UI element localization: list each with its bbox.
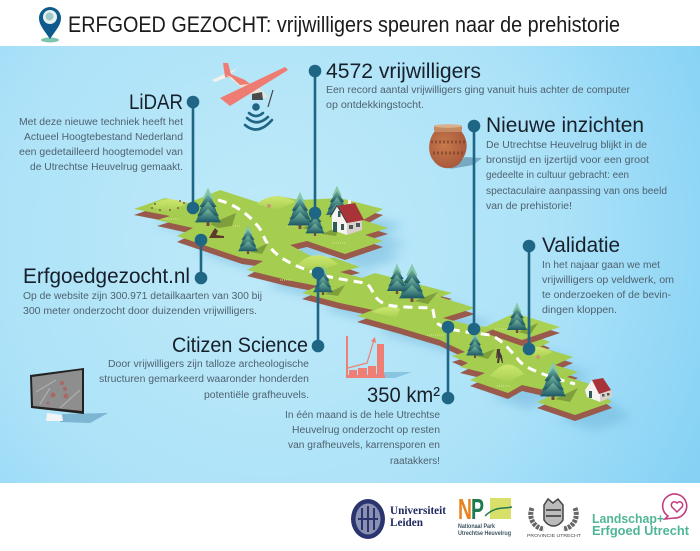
logo: Landschap + Erfgoed Utrecht bbox=[592, 494, 690, 538]
grass tufts bbox=[163, 219, 510, 386]
text block: 4572 vrijwilligers: op ontdekkingstocht. bbox=[326, 100, 424, 111]
icon: prehistoric pot bbox=[429, 124, 482, 169]
text block: LiDAR: een gedetailleerd hoogtemodel van bbox=[19, 147, 183, 158]
text block: 350 km2: 350 km² bbox=[367, 384, 440, 407]
icon: digging person bbox=[209, 228, 224, 238]
logo: Nationaal Park Utrechtse Heuvelrug: N bbox=[458, 494, 472, 526]
text block: Nieuwe inzichten: gedeelte in cultuur gebracht: een bbox=[486, 170, 629, 181]
pin: Erfgoedgezocht.nl bbox=[195, 234, 207, 284]
logo: Landschap + Erfgoed Utrecht: Landschap+ bbox=[592, 512, 664, 526]
text block: Erfgoedgezocht.nl: Erfgoedgezocht.nl bbox=[23, 265, 190, 288]
pin: 4572 vrijwilligers bbox=[309, 65, 321, 219]
pin: Validatie bbox=[523, 240, 535, 355]
icon: location pin bbox=[39, 7, 61, 43]
text block: Citizen Science: Door vrijwilligers zijn talloze archeologische bbox=[108, 359, 310, 370]
pin: LiDAR bbox=[187, 96, 199, 214]
text block: Erfgoedgezocht.nl: 300 meter onderzocht door duizenden vrijwilligers. bbox=[23, 306, 257, 317]
tree shadows bbox=[210, 213, 578, 402]
logo: Universiteit Leiden bbox=[351, 499, 446, 539]
text block: Nieuwe inzichten: bronstijd en ijzertijd voor een groot bbox=[486, 155, 649, 166]
text block: Nieuwe inzichten: Nieuwe inzichten bbox=[486, 114, 644, 137]
title: ERFGOED GEZOCHT: vrijwilligers speuren naar de prehistorie bbox=[68, 12, 620, 37]
logo: Nationaal Park Utrechtse Heuvelrug: Utrechtse Heuvelrug bbox=[458, 531, 511, 537]
text block: 4572 vrijwilligers: Een record aantal vrijwilligers ging vanuit huis achter de computer bbox=[326, 85, 631, 96]
text block: 350 km2: van grafheuvels, karrensporen en bbox=[288, 440, 440, 451]
trees bbox=[195, 186, 566, 400]
text block: 350 km2: Heuvelrug onderzocht op resten bbox=[292, 425, 440, 436]
text block: Erfgoedgezocht.nl bbox=[23, 265, 262, 317]
logo: Provincie Utrecht: PROVINCIE UTRECHT bbox=[527, 533, 581, 538]
pin: Citizen Science bbox=[312, 267, 324, 352]
text block: 350 km2: raatakkers! bbox=[390, 456, 440, 467]
icon: rising bar chart bbox=[346, 336, 412, 378]
text block: Nieuwe inzichten: spectaculaire aanpassing van ons beeld bbox=[486, 186, 667, 197]
text block: LiDAR: de Utrechtse Heuvelrug gemaakt. bbox=[30, 162, 183, 173]
text block: LiDAR bbox=[19, 91, 183, 173]
icon: hiker bbox=[496, 349, 503, 363]
pin: 350 km2 bbox=[442, 321, 454, 404]
icon: small house bbox=[585, 378, 612, 402]
text block: Validatie: In het najaar gaan we met bbox=[542, 260, 660, 271]
logo: Provincie Utrecht bbox=[527, 499, 581, 538]
grave mounds bbox=[151, 200, 540, 359]
text block: Citizen Science bbox=[99, 334, 310, 401]
text block: LiDAR: Met deze nieuwe techniek heeft het bbox=[19, 117, 183, 128]
text block: 350 km2 bbox=[285, 384, 441, 467]
header bbox=[39, 7, 620, 43]
logo: Nationaal Park Utrechtse Heuvelrug bbox=[458, 494, 512, 537]
landscape: Utrechtse Heuvelrug bbox=[134, 186, 632, 431]
text block: Validatie bbox=[542, 234, 674, 316]
logo: Nationaal Park Utrechtse Heuvelrug: P bbox=[471, 494, 484, 526]
text block: Nieuwe inzichten: van de prehistorie! bbox=[486, 201, 572, 212]
text block: 4572 vrijwilligers bbox=[326, 60, 631, 111]
logo: Nationaal Park Utrechtse Heuvelrug: Nationaal Park bbox=[458, 524, 496, 530]
walking route bbox=[218, 200, 575, 384]
hills bbox=[150, 196, 552, 382]
text block: 4572 vrijwilligers: 4572 vrijwilligers bbox=[326, 60, 481, 83]
text block: Citizen Science: Citizen Science bbox=[172, 334, 308, 357]
text block: Validatie: Validatie bbox=[542, 234, 620, 257]
text block: Citizen Science: structuren gemarkeerd waaronder honderden bbox=[99, 374, 309, 385]
text block: Erfgoedgezocht.nl: Op de website zijn 300.971 detailkaarten van 300 bij bbox=[23, 291, 262, 302]
logo: Universiteit Leiden: Universiteit bbox=[390, 505, 446, 517]
text block: Citizen Science: potentiële grafheuvels. bbox=[204, 390, 309, 401]
icon: large house bbox=[330, 200, 364, 235]
logo: Landschap + Erfgoed Utrecht: Erfgoed Utrecht bbox=[592, 524, 690, 538]
raised plateau bbox=[485, 313, 560, 346]
text block: Validatie: vrijwilligers op veldwerk, om bbox=[542, 275, 674, 286]
icon: monitor with height map bbox=[30, 368, 108, 423]
sky background panel bbox=[0, 46, 700, 483]
pin: Nieuwe inzichten bbox=[468, 120, 480, 335]
icon: airplane with lidar signal bbox=[212, 63, 288, 129]
text block: Validatie: dingen kloppen. bbox=[542, 305, 617, 316]
text block: 350 km2: In één maand is de hele Utrechtse bbox=[285, 410, 441, 421]
text block: Validatie: te onderzoeken of de bevin- bbox=[542, 290, 671, 301]
text block: Nieuwe inzichten bbox=[486, 114, 667, 212]
text block: LiDAR: LiDAR bbox=[129, 91, 183, 114]
text block: LiDAR: Actueel Hoogtebestand Nederland bbox=[24, 132, 183, 143]
logo: Universiteit Leiden: Leiden bbox=[390, 517, 424, 529]
text block: Nieuwe inzichten: De Utrechtse Heuvelrug blijkt in de bbox=[486, 140, 648, 151]
